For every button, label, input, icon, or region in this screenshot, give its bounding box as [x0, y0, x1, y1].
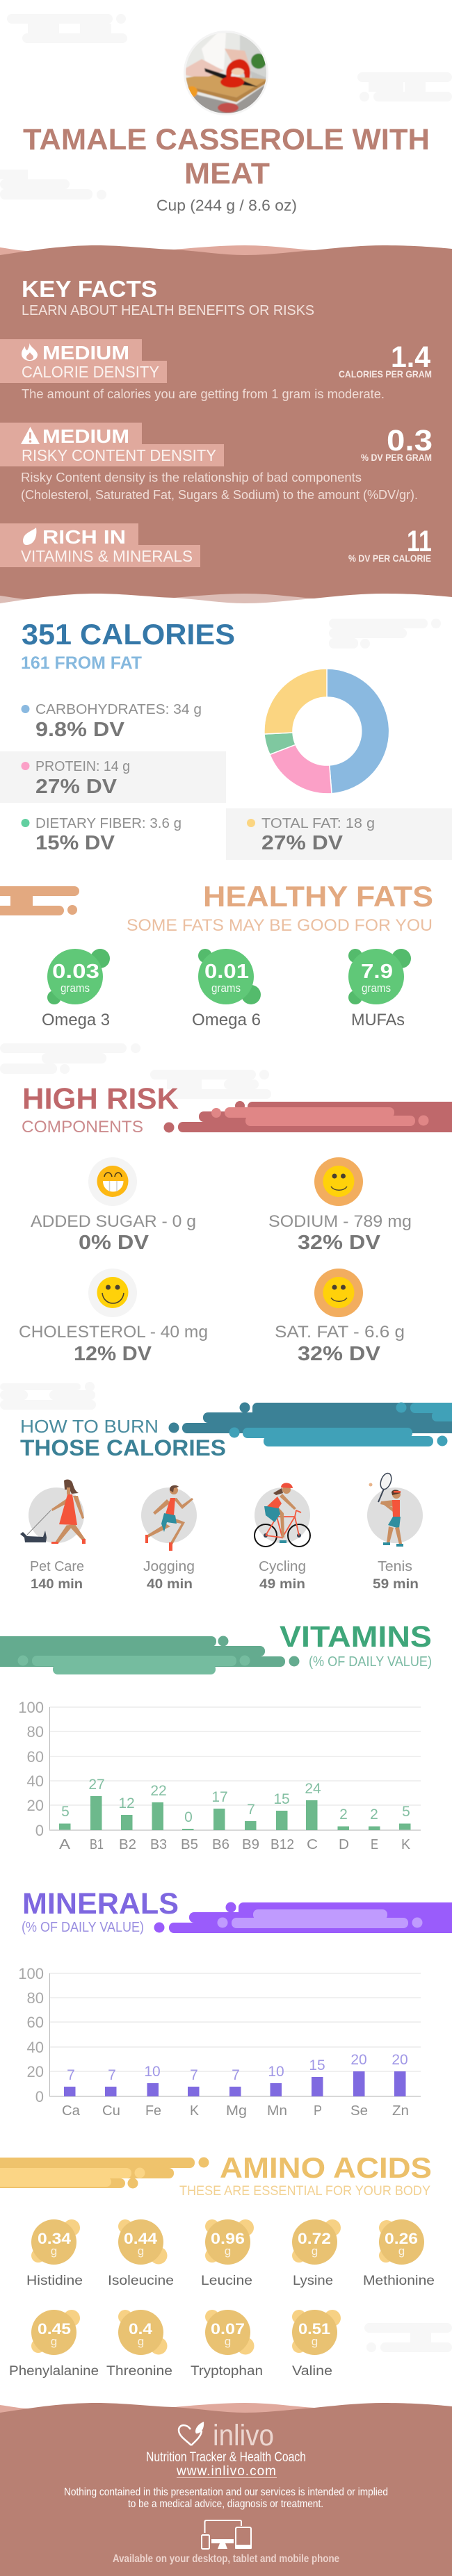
amino: lysine [292, 2219, 341, 2288]
amino: lysine: g [312, 2244, 318, 2258]
badge: omega 6: 0.01 [204, 961, 249, 983]
risk: added sugar: ADDED SUGAR - 0 g [31, 1212, 196, 1231]
amino: isoleucine: Isoleucine [108, 2274, 174, 2288]
amino: leucine: g [225, 2244, 231, 2258]
bar chart: vitamins [18, 1699, 421, 1852]
bar chart: minerals: 20 [27, 2063, 44, 2080]
amino: valine: Valine [292, 2364, 332, 2379]
badge: mufas [348, 949, 411, 1029]
vitamins heading: (% OF DAILY VALUE) [309, 1654, 432, 1670]
amino: threonine [106, 2310, 172, 2379]
activity: cycling: Cycling [259, 1559, 306, 1574]
bar chart: vitamins: 100 [18, 1699, 44, 1716]
disclaimer [64, 2486, 388, 2510]
amino: tryptophan: Tryptophan [191, 2364, 263, 2379]
calorie density: CALORIE DENSITY [22, 363, 159, 381]
activity: pet care [20, 1479, 86, 1592]
panel: key facts [0, 245, 452, 612]
bar chart: vitamins: B6 [212, 1837, 229, 1852]
calorie density: MEDIUM [42, 342, 129, 364]
bar chart: minerals: Zn [392, 2103, 409, 2119]
stat: dietary fiber: DIETARY FIBER: 3.6 g [35, 816, 181, 831]
amino: lysine: Lysine [293, 2274, 333, 2288]
bar chart: minerals: Cu [102, 2103, 120, 2119]
bar chart: vitamins: B9 [242, 1837, 259, 1852]
amino: lysine: 0.72 [298, 2230, 331, 2247]
activity: pet care: Pet Care [30, 1559, 84, 1574]
badge: omega 3: grams [60, 981, 90, 995]
bar chart: minerals: 80 [27, 1989, 44, 2007]
minerals heading: MINERALS [22, 1887, 179, 1921]
icon: inlivo heart logo [179, 2422, 204, 2445]
disclaimer: Nothing contained in this presentation and our services is intended or implied [64, 2486, 388, 2498]
vitamins heading: VITAMINS [280, 1620, 432, 1654]
badge: omega 3: Omega 3 [42, 1011, 110, 1029]
disclaimer: to be a medical advice, diagnosis or treatment. [128, 2498, 323, 2510]
tagline: Nutrition Tracker & Health Coach [146, 2450, 306, 2465]
stat: carbohydrates [21, 702, 202, 741]
bar chart: vitamins: B3 [150, 1837, 167, 1852]
amino acids heading: THESE ARE ESSENTIAL FOR YOUR BODY [179, 2184, 430, 2199]
key facts heading: LEARN ABOUT HEALTH BENEFITS OR RISKS [22, 303, 314, 318]
bar chart: vitamins: B12 [271, 1837, 294, 1852]
brand name: inlivo [213, 2419, 274, 2452]
stat: carbohydrates: CARBOHYDRATES: 34 g [35, 702, 202, 717]
stat: total fat: TOTAL FAT: 18 g [261, 816, 375, 831]
calories heading: 351 CALORIES [22, 618, 235, 651]
bar chart: vitamins: 24 [305, 1781, 321, 1797]
risk: saturated fat: SAT. FAT - 6.6 g [275, 1323, 405, 1342]
amino: leucine: 0.96 [211, 2230, 245, 2247]
rich in vitamins and minerals: 11 [407, 525, 432, 558]
bar chart: minerals: P [314, 2103, 322, 2119]
bar chart: vitamins: D [339, 1837, 349, 1852]
badge: omega 6 [192, 949, 261, 1029]
amino: histidine [26, 2219, 83, 2288]
bar chart: vitamins: 40 [27, 1772, 44, 1790]
bar chart: minerals: Se [350, 2103, 368, 2119]
risky content density: Risky Content density is the relationship of bad components [21, 471, 362, 484]
amino: isoleucine: 0.44 [124, 2230, 158, 2247]
badge: mufas: MUFAs [351, 1011, 405, 1029]
availability note: Available on your desktop, tablet and mobile phone [113, 2553, 339, 2565]
bar chart: vitamins: 2 [370, 1807, 378, 1823]
risky content density: (Cholesterol, Saturated Fat, Sugars & Sodium) to the amount (%DV/gr). [21, 488, 418, 502]
risky content density: 0.3 [387, 424, 433, 457]
bar chart: vitamins: 0 [184, 1809, 193, 1825]
healthy fats heading: SOME FATS MAY BE GOOD FOR YOU [127, 916, 433, 935]
stat: total fat: 27% DV [261, 832, 344, 854]
stat: protein [0, 751, 226, 803]
key facts heading: KEY FACTS [22, 276, 157, 302]
risky content density: % DV PER GRAM [361, 452, 432, 463]
amino: tryptophan [191, 2310, 263, 2379]
panel: footer [0, 2403, 452, 2576]
title [23, 123, 430, 190]
amino: methionine: g [398, 2244, 405, 2258]
amino acids heading [179, 2151, 432, 2199]
minerals heading [22, 1887, 179, 1935]
bar chart: vitamins: 17 [211, 1789, 228, 1805]
bar chart: minerals: K [190, 2103, 200, 2119]
amino: phenylalanine [9, 2310, 99, 2379]
badge: omega 3: 0.03 [52, 961, 99, 983]
website link: www.inlivo.com [176, 2464, 276, 2479]
bar chart: vitamins: 5 [61, 1804, 70, 1820]
bar chart: vitamins: 22 [150, 1783, 167, 1799]
bar chart: vitamins: 20 [27, 1797, 44, 1814]
calorie density: CALORIES PER GRAM [339, 368, 432, 380]
risky content density: MEDIUM [42, 425, 129, 447]
risk: sodium: SODIUM - 789 mg [268, 1212, 412, 1231]
amino: histidine: Histidine [26, 2274, 83, 2288]
bar chart: vitamins: 0 [35, 1822, 44, 1839]
badge: mufas: 7.9 [361, 961, 393, 983]
stat: total fat [226, 808, 452, 860]
high risk heading: HIGH RISK [22, 1082, 179, 1116]
risk: sodium [268, 1157, 412, 1254]
rich in vitamins and minerals: VITAMINS & MINERALS [21, 547, 193, 565]
healthy fats heading [127, 880, 433, 935]
minerals heading: (% OF DAILY VALUE) [22, 1920, 144, 1935]
activity: cycling: 49 min [259, 1577, 305, 1592]
bar chart: vitamins: E [371, 1837, 378, 1852]
burn heading: HOW TO BURN [20, 1416, 159, 1437]
icon: devices [202, 2520, 252, 2549]
stat: dietary fiber: 15% DV [35, 832, 115, 854]
activity: tennis: 59 min [373, 1577, 419, 1592]
activity: jogging [141, 1485, 197, 1592]
amino: phenylalanine: g [51, 2335, 57, 2348]
amino: histidine: g [51, 2244, 57, 2258]
bar chart: minerals: 100 [18, 1965, 44, 1982]
amino: threonine: g [138, 2335, 144, 2348]
calorie density: 1.4 [391, 341, 430, 374]
risk: added sugar [31, 1157, 196, 1254]
burn heading: THOSE CALORIES [20, 1435, 226, 1460]
amino: histidine: 0.34 [38, 2230, 72, 2247]
bar chart: minerals: Mg [226, 2103, 247, 2119]
bar chart: minerals: 20 [350, 2052, 367, 2068]
activity: tennis: Tenis [378, 1559, 412, 1574]
amino: methionine: Methionine [363, 2274, 435, 2288]
bar chart: vitamins: 12 [118, 1795, 135, 1811]
bar chart: vitamins: K [401, 1837, 411, 1852]
food photo [184, 31, 268, 115]
stat: carbohydrates: 9.8% DV [35, 719, 125, 741]
amino: isoleucine: g [138, 2244, 144, 2258]
amino acids banner [0, 2158, 209, 2188]
bar chart: minerals: 0 [35, 2088, 44, 2105]
bar chart: minerals: Mn [267, 2103, 287, 2119]
amino: methionine: 0.26 [385, 2230, 418, 2247]
badge: omega 6: Omega 6 [192, 1011, 261, 1029]
bar chart: vitamins: 5 [402, 1804, 410, 1820]
amino: phenylalanine: Phenylalanine [9, 2364, 99, 2379]
rich in vitamins and minerals [0, 523, 432, 567]
risky content density: RISKY CONTENT DENSITY [22, 446, 216, 464]
bar chart: minerals: 15 [309, 2057, 325, 2073]
bar chart: minerals: Ca [62, 2103, 81, 2119]
amino: threonine: 0.4 [129, 2320, 153, 2338]
healthy fats heading: HEALTHY FATS [203, 880, 433, 913]
amino acids heading: AMINO ACIDS [220, 2151, 432, 2184]
bar chart: minerals: 10 [268, 2064, 284, 2080]
burn heading [20, 1416, 226, 1460]
amino: tryptophan: 0.07 [211, 2320, 245, 2338]
risk: cholesterol: CHOLESTEROL - 40 mg [19, 1323, 208, 1342]
amino: valine: g [312, 2335, 318, 2348]
vitamins banner [0, 1636, 299, 1674]
activity: jogging: 40 min [147, 1577, 193, 1592]
bar chart: vitamins: 80 [27, 1723, 44, 1741]
high risk heading: COMPONENTS [22, 1118, 143, 1136]
bar chart: vitamins: 2 [339, 1807, 348, 1823]
risk: sodium: 32% DV [298, 1232, 381, 1254]
calories heading [21, 618, 235, 673]
bar chart: vitamins: A [59, 1837, 71, 1852]
amino: phenylalanine: 0.45 [38, 2320, 71, 2338]
high risk banner [164, 1101, 452, 1133]
stat: protein: PROTEIN: 14 g [35, 759, 130, 774]
calories heading: 161 FROM FAT [21, 653, 142, 673]
calorie density [0, 339, 432, 401]
amino: threonine: Threonine [106, 2364, 172, 2379]
amino: valine: 0.51 [298, 2320, 330, 2338]
bar chart: vitamins: 15 [273, 1791, 290, 1807]
key facts heading [22, 276, 314, 318]
badge: omega 6: grams [211, 981, 241, 995]
badge: mufas: grams [362, 981, 391, 995]
vitamins heading [280, 1620, 432, 1670]
risk: cholesterol: 12% DV [74, 1343, 152, 1365]
rich in vitamins and minerals: % DV PER CALORIE [348, 553, 431, 564]
bar chart: minerals: 7 [232, 2067, 240, 2083]
serving size: Cup (244 g / 8.6 oz) [156, 197, 297, 214]
risk: cholesterol [19, 1269, 208, 1365]
risk: added sugar: 0% DV [79, 1232, 150, 1254]
activity: pet care: 140 min [31, 1577, 83, 1592]
amino: valine [292, 2310, 341, 2379]
activity: tennis [367, 1472, 423, 1592]
bar chart: vitamins: C [307, 1837, 318, 1852]
donut chart [264, 669, 389, 794]
amino: leucine [201, 2219, 254, 2288]
bar chart: minerals: Fe [145, 2103, 161, 2119]
amino: isoleucine [108, 2219, 174, 2288]
activity: jogging: Jogging [143, 1559, 195, 1574]
bar chart: minerals: 60 [27, 2014, 44, 2031]
bar chart: minerals: 7 [67, 2067, 75, 2083]
calorie density: The amount of calories you are getting from 1 gram is moderate. [22, 387, 385, 401]
bar chart: vitamins: B5 [181, 1837, 198, 1852]
stat: dietary fiber [21, 816, 181, 854]
stat: protein: 27% DV [35, 776, 118, 798]
bar chart: minerals [18, 1965, 421, 2119]
healthy fats banner [0, 886, 79, 915]
risky content density [0, 423, 433, 502]
bar chart: minerals: 40 [27, 2039, 44, 2056]
title: TAMALE CASSEROLE WITH [23, 123, 430, 156]
bar chart: vitamins: 60 [27, 1748, 44, 1766]
amino: tryptophan: g [225, 2335, 231, 2348]
bar chart: minerals: 20 [392, 2052, 408, 2068]
title: MEAT [184, 157, 270, 190]
activity: cycling [255, 1483, 310, 1592]
burn banner [168, 1403, 452, 1446]
high risk heading [22, 1082, 179, 1136]
amino: methionine [363, 2219, 435, 2288]
bar chart: minerals: 7 [190, 2067, 198, 2083]
rich in vitamins and minerals: RICH IN [42, 526, 126, 548]
bar chart: vitamins: 7 [247, 1802, 255, 1818]
bar chart: minerals: 7 [108, 2067, 116, 2083]
bar chart: vitamins: B1 [90, 1837, 104, 1852]
risk: saturated fat [275, 1269, 405, 1365]
bar chart: vitamins: B2 [119, 1837, 136, 1852]
risk: saturated fat: 32% DV [298, 1343, 381, 1365]
badge: omega 3 [42, 949, 110, 1029]
bar chart: vitamins: 27 [88, 1777, 105, 1793]
amino: leucine: Leucine [201, 2274, 252, 2288]
bar chart: minerals: 10 [144, 2064, 161, 2080]
minerals banner [154, 1902, 452, 1933]
